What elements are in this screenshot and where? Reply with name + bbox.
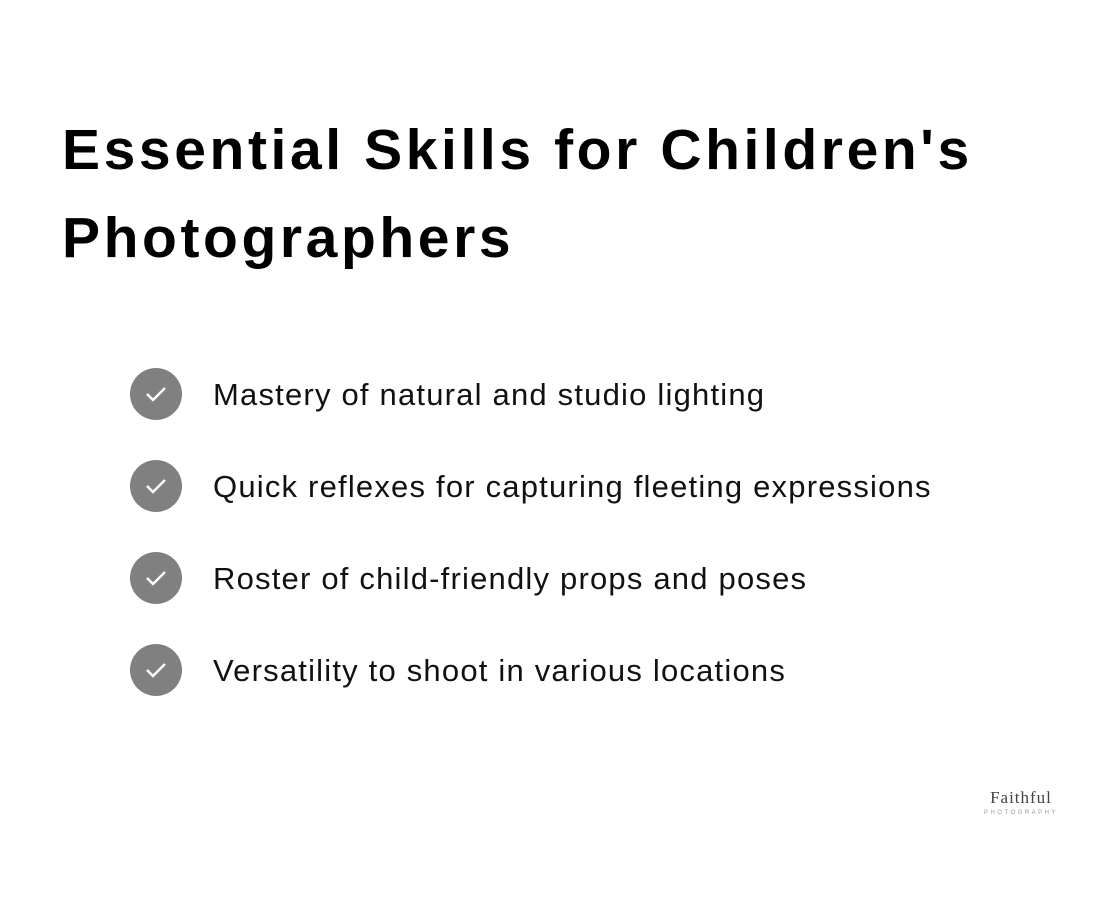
title — [62, 118, 973, 270]
title: Photographers — [62, 206, 514, 270]
logo — [984, 788, 1058, 816]
item 3 — [130, 552, 807, 604]
item 1: Mastery of natural and studio lighting — [213, 377, 765, 412]
icon: check — [130, 460, 182, 512]
title: Essential Skills for Children's — [62, 118, 973, 182]
item 4 — [130, 644, 786, 696]
logo: Faithful — [990, 788, 1052, 807]
icon: check — [130, 644, 182, 696]
icon: check — [130, 552, 182, 604]
item 2: Quick reflexes for capturing fleeting expressions — [213, 469, 932, 504]
item 3: Roster of child-friendly props and poses — [213, 561, 807, 596]
item 2 — [130, 460, 932, 512]
logo: PHOTOGRAPHY — [984, 810, 1058, 816]
item 1 — [130, 368, 765, 420]
item 4: Versatility to shoot in various locations — [213, 653, 786, 688]
icon: check — [130, 368, 182, 420]
